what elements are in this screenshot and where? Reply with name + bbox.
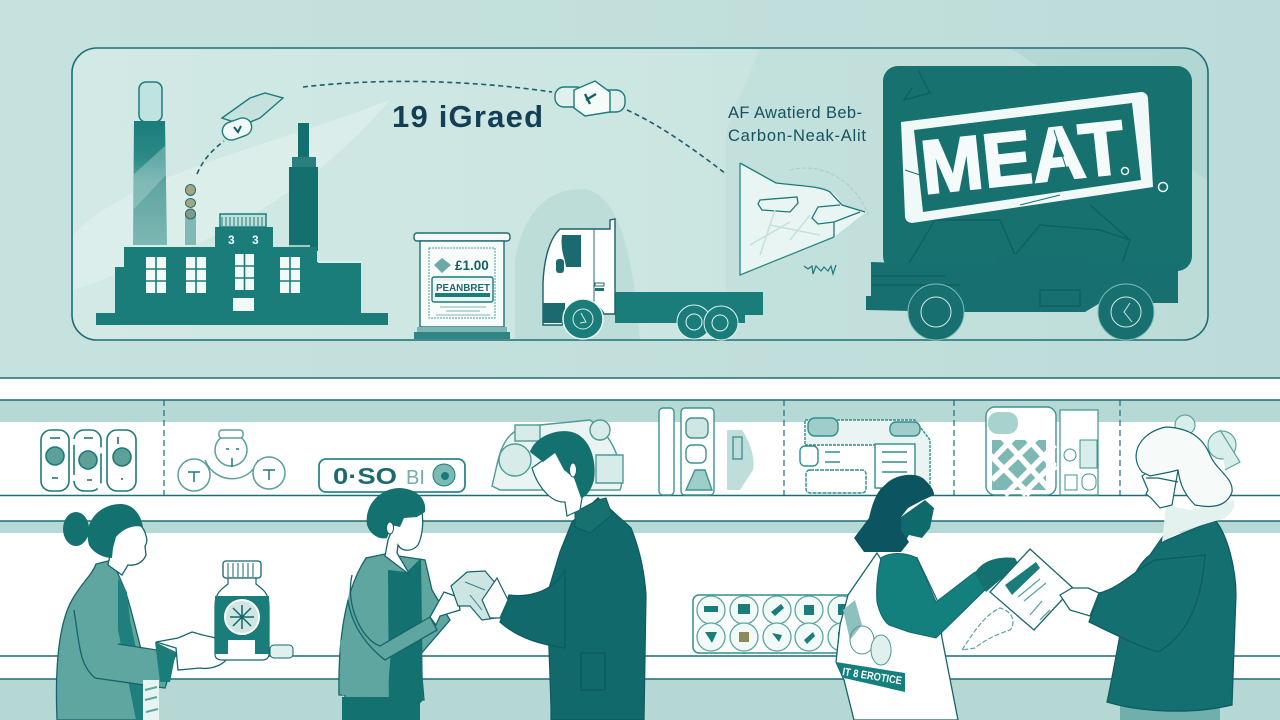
pants [342,697,420,720]
icon: map fragment [740,163,868,275]
shelf sign: oso label: 0·SO [333,463,397,489]
tote decorations [843,600,862,640]
sleeve [1089,555,1205,652]
arrow: dashed route [197,81,726,174]
face [385,505,423,575]
sketch: stain near flyer [962,608,1013,650]
factory windows [146,254,300,311]
factory tower numerals: 3 [228,233,235,247]
neck and scarf [1162,500,1234,542]
sign price: £1.00 [455,258,489,273]
background: store wall and floor [0,378,1280,720]
icon: factory [96,82,388,325]
tote label: IT 8 EROTICE [842,666,903,687]
factory tower numerals: 3 [252,233,259,247]
hair [367,488,425,538]
truck chassis [866,254,1178,312]
tote bag and strap [836,553,958,720]
shelf icons: three faces [178,430,285,491]
person: child with jacket [339,488,460,720]
hand [975,558,1019,592]
hair [530,431,595,498]
text: award label: AF Awatierd Beb- [728,104,862,122]
face [901,500,934,542]
hand [1060,588,1099,616]
hair [854,475,934,552]
ear [386,522,394,534]
shelf icons: package column [659,408,754,495]
truck rear wheels [677,305,738,340]
ear [570,463,576,477]
text: award label: Carbon-Neak-Alit [728,127,866,145]
person: shopper with tote bag [836,475,1019,720]
icon: price sign: PEANBRET [436,283,490,294]
icon: supplement bottle [215,561,293,660]
coat [56,560,158,720]
shelf icons: lattice package [986,407,1098,495]
icon: flyer [990,549,1073,630]
icon: price sign [414,233,510,339]
hand [482,578,508,618]
big truck [866,66,1192,340]
truck wheels [908,284,1154,340]
shelf sign: oso label [319,459,465,492]
bun [63,512,89,546]
hair [88,504,143,558]
heading: grade label: 19 iGraed [392,99,543,134]
torso and arm [877,554,985,638]
panel: supply chain frame [72,48,1208,340]
person: woman with white hair [1060,427,1236,720]
truck cargo box [883,66,1192,271]
tall glass chimney [133,82,167,245]
face [108,523,147,575]
shelf sign: oso label: BI [406,467,425,489]
truck front wheel [563,299,603,339]
coat [1107,520,1236,711]
icon: capsule right [555,81,625,116]
shelf icons: labelled boxes [800,418,930,493]
background: upper sky [0,0,1280,378]
tote label [836,662,905,692]
logo: MEAT stamp: MEAT [917,105,1129,211]
face and neck [532,448,585,516]
factory tower numerals [228,233,259,247]
small chimney and puffs [185,184,196,245]
person: man in dark coat [482,431,646,720]
coat [547,498,646,720]
icon: sketched pill capsule left [220,93,283,143]
white hair [1136,427,1232,507]
factory body [96,227,388,325]
lapel [575,498,612,533]
arm and hands [156,632,228,670]
sign band [432,277,493,302]
text: award label [728,104,866,145]
hand [430,592,460,625]
jacket [339,554,450,720]
shelf icons: sketch behind shopper [1175,415,1240,470]
right chimney [289,123,318,251]
icon: handed-over packet [451,571,497,620]
pants [1120,705,1220,720]
logo: MEAT stamp [901,92,1168,223]
glasses [1146,478,1178,482]
person: woman with bun [56,504,228,720]
shelf icons: three dial pills [41,430,136,491]
small truck [543,219,763,340]
shelf icons: produce [492,420,623,490]
panel: badge tray [693,595,856,653]
face [1142,464,1178,508]
